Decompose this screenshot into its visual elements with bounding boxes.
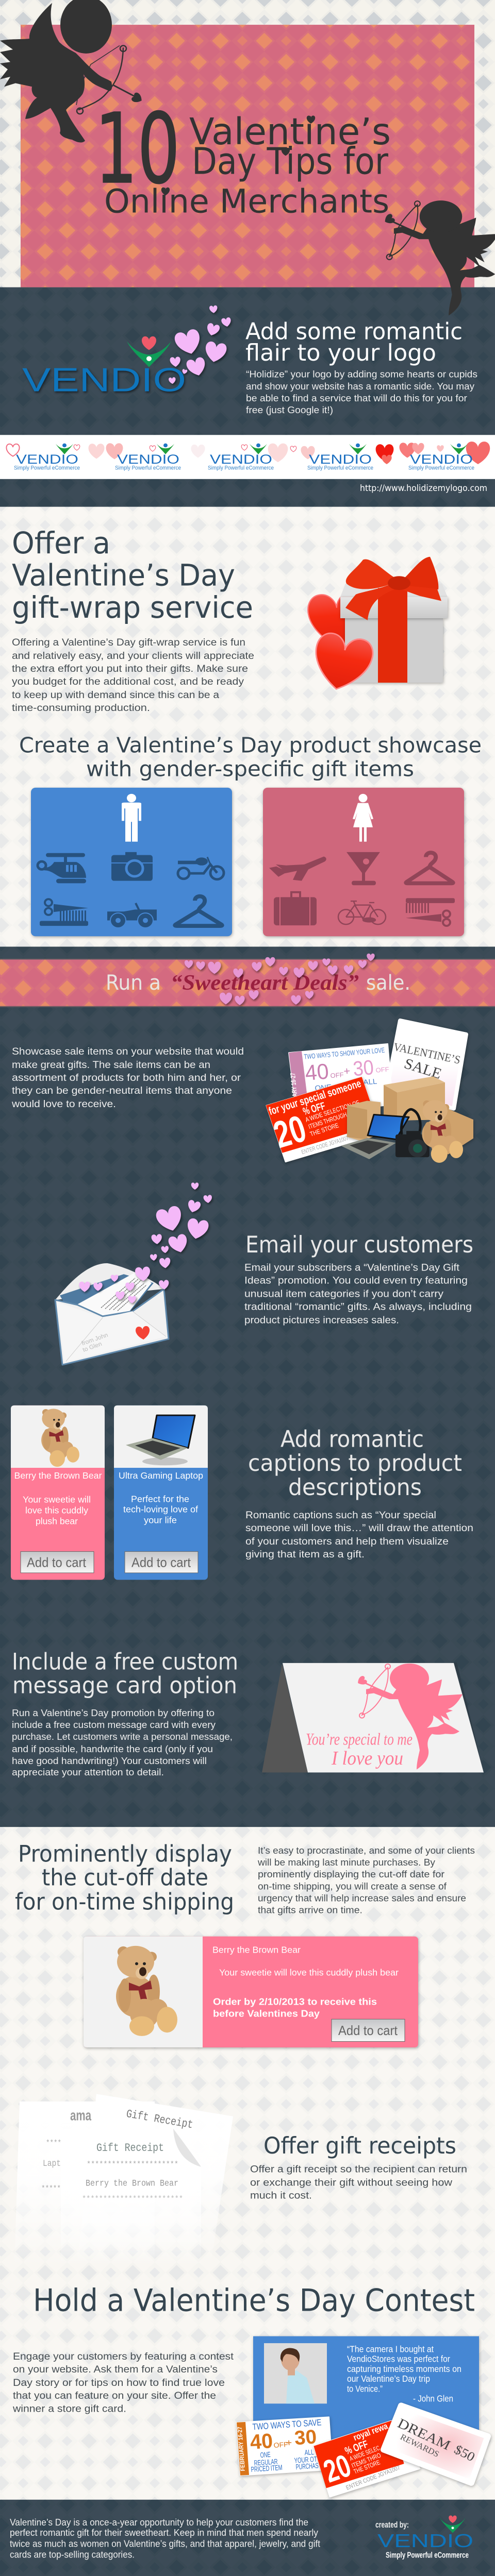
red coupon: 20 [269, 1107, 311, 1156]
icon: jeep [107, 903, 157, 928]
text block: logo tip: free (just Google it!) [246, 405, 333, 416]
banner heading: “Sweetheart Deals” [171, 971, 359, 995]
teddy bear [116, 1946, 177, 2036]
text block: message card tip: include a free custom message card with every [12, 1720, 216, 1731]
quote: VendioStores was perfect for [347, 2354, 450, 2364]
panel: dark footer background [0, 2500, 495, 2576]
text block: sale tip: they can be gender-neutral items that anyone [12, 1085, 232, 1096]
orange coupon: TWO WAYS TO SAVE [252, 2417, 322, 2432]
text block: message card tip [12, 1708, 233, 1778]
text block: message card tip: purchase. Let customers write a personal message, [12, 1732, 233, 1742]
text block: receipts tip [250, 2164, 467, 2201]
text block: captions tip: giving that item as a gift. [245, 1549, 365, 1560]
text block: cut-off tip: It’s easy to procrastinate, and some of your clients [258, 1845, 475, 1856]
card message [306, 1730, 412, 1769]
text block: gift-wrap tip [12, 637, 254, 714]
red coupon: ITEMS THROUGH [307, 1111, 348, 1130]
product text: Your sweetie will [23, 1495, 91, 1504]
icon: woman [353, 794, 373, 842]
icon: motorcycle [178, 857, 224, 879]
red coupon: % OFF [343, 2438, 370, 2457]
panel: light gift-wrap and showcase background [0, 507, 495, 947]
envelope writing: from John [81, 1332, 109, 1347]
icon: suitcase [274, 892, 317, 925]
back left receipt [14, 2102, 155, 2266]
illustration: love letter envelope with hearts: to Glen [82, 1341, 103, 1353]
text block: email tip: product pictures increases sales. [244, 1315, 399, 1326]
teddy bear [422, 1100, 463, 1163]
valentine's sale card [387, 1021, 466, 1109]
logo sample 3: VENDIO [210, 452, 272, 467]
logo sample 2: VENDIO [117, 452, 179, 467]
floating hearts [169, 305, 232, 384]
logo sample 4: VENDIO [309, 452, 372, 467]
text block: contest tip [12, 2351, 234, 2415]
text block: cut-off tip: on-time shipping, you will create a sense of [258, 1882, 447, 1892]
product text: Ultra Gaming Laptop [119, 1471, 203, 1481]
orange coupon: ALL [304, 2448, 314, 2457]
title [95, 93, 391, 221]
listing text: Berry the Brown Bear [212, 1945, 301, 1955]
illustration: sale collage [267, 1021, 473, 1163]
icon: bicycle [338, 901, 386, 924]
quote: to Venice.” [347, 2384, 383, 2394]
heading: custom message card [12, 1648, 238, 1699]
icon: hanger [175, 896, 222, 926]
red coupon: A WIDE SELECTION OF [304, 1098, 360, 1124]
quote: “The camera I bought at [347, 2344, 434, 2354]
red coupon: THE STORE [309, 1121, 340, 1138]
envelope front [55, 1289, 169, 1365]
text block: logo tip: be able to find a service that will do this for you for [246, 393, 468, 404]
orange coupon: REGULAR [254, 2458, 278, 2467]
orange coupon: 40 [249, 2429, 274, 2454]
text block: message card tip: have good handwriting!) Your customers will [12, 1756, 207, 1767]
panel: holiday logo samples strip [0, 435, 495, 479]
heading: custom message card: message card option [12, 1672, 237, 1699]
logo sample 3 [208, 444, 274, 471]
logo wordmark: VENDIO [22, 362, 186, 399]
red coupon [267, 1077, 381, 1162]
text block: conclusion: perfect romantic gift for their sweetheart. Keep in mind that men spend nearly [10, 2527, 319, 2538]
big cardboard box [384, 1076, 445, 1121]
right cardboard box [433, 1106, 473, 1154]
text block: gift-wrap tip: Offering a Valentine’s Day gift-wrap service is fun [12, 637, 245, 648]
icon: cupid bottom right [383, 200, 495, 315]
two ways coupon: 30 [352, 1056, 375, 1080]
card back [262, 1664, 308, 1772]
photo of customer [264, 2343, 327, 2403]
dream rewards gift card [384, 2405, 488, 2483]
text block: email tip: Ideas” promotion. You could even try featuring [244, 1275, 468, 1286]
text block: cut-off tip: will be making last minute purchases. By [257, 1857, 435, 1868]
quote: our Valentine’s Day trip [347, 2374, 430, 2384]
title: Day Tips for [192, 141, 388, 183]
icon: comb and scissors [406, 898, 455, 926]
text block: gift-wrap tip: to keep up with demand since this can be a [12, 689, 220, 701]
card message: I love you [331, 1748, 403, 1769]
heading: romantic captions: captions to product [248, 1450, 462, 1477]
front receipt [61, 2129, 201, 2266]
text block: receipts tip: Offer a gift receipt so the recipient can return [250, 2164, 467, 2175]
back right receipt [77, 2094, 233, 2264]
heading: romantic captions [248, 1426, 462, 1501]
front receipt: Berry the Brown Bear [86, 2179, 178, 2189]
text block: contest tip: that you can feature on your site. Offer the [13, 2390, 216, 2401]
illustration: love letter envelope with hearts [55, 1182, 212, 1365]
icon: scissors and comb [40, 899, 88, 926]
panel: hero background [0, 0, 495, 287]
orange coupon: YOUR OT [294, 2455, 317, 2465]
heading: product showcase: with gender-specific gift items [86, 757, 414, 782]
text block: captions tip [245, 1510, 473, 1560]
front receipt: ************************ [82, 2195, 183, 2204]
two ways coupon: + [343, 1064, 351, 1077]
logo person [439, 2515, 466, 2533]
heading: romantic flair [245, 318, 463, 366]
icon: man [122, 794, 141, 842]
logo sample 5 [408, 444, 474, 471]
front receipt: Gift Receipt [96, 2141, 164, 2155]
icon: hanger [406, 853, 453, 883]
panel: testimonial [253, 2336, 479, 2442]
product text: your life [144, 1515, 177, 1526]
heading: romantic captions: Add romantic [280, 1426, 424, 1452]
credit: created by Vendio [375, 2515, 473, 2560]
orange coupon: PURCHAS [295, 2462, 319, 2471]
title: Online Merchants [104, 183, 389, 221]
orange coupon [237, 2417, 333, 2476]
teddy bear [41, 1409, 79, 1467]
text block: gift-wrap tip: you budget for the additional cost, and be ready [12, 676, 244, 687]
heading: product showcase: Create a Valentine’s Day product showcase [19, 733, 482, 757]
panel: product card laptop [114, 1405, 208, 1580]
quote [347, 2344, 461, 2403]
logo sample 5: Simply Powerful eCommerce [408, 465, 474, 471]
logo sample 2: Simply Powerful eCommerce [115, 465, 181, 471]
heading: cut-off date: the cut-off date [42, 1864, 208, 1891]
text block: conclusion: cards are top-selling categories. [10, 2549, 135, 2560]
orange coupon: 30 [294, 2426, 318, 2449]
heading: gift-wrap service: gift-wrap service [12, 590, 253, 625]
icon: cupid top left [0, 0, 144, 143]
logo sample 1: Simply Powerful eCommerce [14, 465, 80, 471]
icon: martini glass [346, 852, 380, 885]
logo sample 2 [115, 444, 181, 471]
panel: sweetheart deals banner [0, 954, 495, 1007]
text block: logo tip: “Holidize” your logo by adding some hearts or cupids [246, 369, 477, 380]
two ways coupon: ONE [315, 1083, 332, 1093]
text block: receipts tip: much it cost. [250, 2190, 312, 2201]
red coupon: ENTER CODE JGYA1007 [345, 2464, 401, 2491]
two ways coupon: BRUARY 16-27 [289, 1073, 300, 1108]
listing text [212, 1945, 399, 2019]
red coupon: % OFF [302, 1100, 327, 1117]
text block: sale tip: make great gifts. The sale items can be an [12, 1059, 210, 1071]
banner hearts [185, 954, 375, 1005]
product text [119, 1471, 203, 1526]
add to cart button [125, 1552, 198, 1573]
two ways coupon: OFF [330, 1071, 344, 1079]
add to cart button: Add to cart [338, 2023, 398, 2038]
red coupon: for your special someone [267, 1077, 362, 1117]
back left receipt: **** [46, 2140, 61, 2147]
back left receipt: Lapt [43, 2159, 61, 2169]
add to cart button [332, 2019, 405, 2041]
heading: romantic flair: Add some romantic [245, 318, 463, 345]
dream rewards gift card: $50 [452, 2442, 477, 2464]
letter [77, 1272, 152, 1316]
heading: gift-wrap service [12, 526, 253, 625]
red coupon: THE STORE [352, 2459, 381, 2476]
panel: dark logo section background [0, 287, 495, 507]
banner heading [106, 971, 410, 995]
valentine's sale card: SALE [402, 1056, 443, 1082]
back left receipt: ama [70, 2107, 91, 2124]
product text: love this cuddly [25, 1505, 88, 1515]
product text: plush bear [36, 1516, 78, 1527]
product text [14, 1471, 102, 1527]
panel: product card bear [11, 1405, 105, 1580]
text block: conclusion [10, 2517, 321, 2560]
envelope interior [60, 1274, 154, 1313]
text block: email tip [244, 1262, 472, 1326]
heading: gift receipts: Offer gift receipts [263, 2132, 456, 2159]
heading: gift-wrap service: Valentine’s Day [12, 558, 235, 592]
logo sample 3: Simply Powerful eCommerce [208, 465, 274, 471]
product text: Perfect for the [131, 1494, 189, 1504]
banner heading: sale. [366, 971, 410, 995]
panel: gifts for her [263, 788, 464, 936]
heading: cut-off date [15, 1840, 234, 1916]
panel: product listing with order-by date [84, 1937, 418, 2047]
listing text: Order by 2/10/2013 to receive this [213, 1996, 377, 2007]
product text: tech-loving love of [123, 1504, 198, 1514]
quote: - John Glen [413, 2394, 453, 2403]
add to cart button: Add to cart [27, 1555, 87, 1570]
text block: logo tip: and show your website has a romantic side. You may [246, 381, 474, 392]
text block: cut-off tip: that gifts arrive on time. [258, 1905, 362, 1916]
title: 10 [95, 93, 180, 206]
title: Valentine’s [189, 111, 391, 153]
back flap [55, 1263, 164, 1300]
panel: gifts for him [31, 788, 232, 936]
red coupon: ENTER CODE JGYA1007 [301, 1135, 349, 1156]
banner heading: Run a [106, 971, 161, 995]
rising hearts [79, 1182, 212, 1303]
icon: airplane [269, 856, 326, 881]
two ways coupon: TWO WAYS TO SHOW YOUR LOVE [304, 1046, 385, 1061]
red coupon: 20 [319, 2448, 356, 2489]
add to cart button: Add to cart [131, 1555, 191, 1570]
text block: gift-wrap tip: time-consuming production. [12, 702, 150, 714]
text block: gift-wrap tip: and relatively easy, and your clients will appreciate [12, 650, 254, 662]
decorative hearts on logos [6, 442, 490, 464]
quote: capturing timeless moments on [347, 2364, 461, 2374]
wax heart [135, 1326, 151, 1340]
orange coupon: ONE [260, 2451, 271, 2460]
text block: conclusion: twice as much as women on Valentine’s gifts, and that apparel, jewelry, and gift [10, 2538, 321, 2549]
heading: cut-off date: for on-time shipping [15, 1889, 234, 1916]
text block: logo tip [246, 369, 477, 416]
logo sample 1 [14, 444, 80, 471]
text block: captions tip: Romantic captions such as “Your special [245, 1510, 436, 1521]
two ways coupon: OFF [375, 1065, 389, 1074]
icon: helicopter [38, 853, 86, 883]
text block: message card tip: and if possible, handwrite the card (only if you [12, 1744, 213, 1755]
icon: Vendio logo with floating hearts [22, 305, 232, 399]
card front [283, 1663, 484, 1772]
text block: message card tip: appreciate your attention to detail. [12, 1767, 164, 1778]
small cardboard box [347, 1101, 381, 1141]
heading: cut-off date: Prominently display [18, 1840, 232, 1867]
heading: product showcase [19, 733, 482, 782]
orange coupon: PRICED ITEM [251, 2464, 283, 2474]
text block: captions tip: of your customers and help them visualize [245, 1536, 449, 1547]
add to cart button [21, 1552, 94, 1573]
text block: cut-off tip: prominently displaying the cut-off date for [258, 1870, 445, 1880]
text block: cut-off tip: urgency that will help increase sales and ensure [258, 1893, 466, 1904]
listing text: before Valentines Day [213, 2008, 320, 2019]
heading: gift-wrap service: Offer a [12, 526, 110, 561]
text block: email tip: Email your subscribers a “Valentine’s Day Gift [244, 1262, 459, 1273]
valentine's sale card: VALENTINE’S [392, 1040, 461, 1066]
heading: custom message card: Include a free custom [12, 1648, 238, 1675]
logo sample 1: VENDIO [16, 452, 78, 467]
logo sample 4 [307, 444, 373, 471]
orange coupon: FEBRUARY 16-27 [237, 2426, 246, 2471]
text block: contest tip: on your website. Ask them for a Valentine’s [13, 2364, 218, 2375]
heading: romantic captions: descriptions [288, 1474, 422, 1501]
panel: light cut-off, receipts and contest background [0, 1827, 495, 2500]
laptop [341, 1114, 409, 1159]
two ways coupon [289, 1044, 393, 1114]
back right receipt: Gift Receipt [125, 2107, 194, 2131]
text block: contest tip: Day story or for tips on how to find true love [13, 2377, 225, 2388]
text block: receipts tip: or exchange their gift without seeing how [250, 2177, 453, 2188]
text block: captions tip: someone will love this…” will draw the attention [245, 1522, 473, 1534]
text block: sale tip: assortment of products for both him and her, or [12, 1072, 241, 1083]
red coupon: royal rewa [352, 2421, 389, 2443]
illustration: contest coupons [237, 2405, 488, 2497]
text block: conclusion: Valentine’s Day is a once-a-year opportunity to help your customers find the [10, 2517, 308, 2528]
panel: dark sale, email, captions and card background [0, 947, 495, 1827]
laptop [126, 1415, 195, 1465]
illustration: message card [262, 1663, 484, 1772]
front receipt: ********************** [87, 2161, 178, 2169]
illustration: gift receipts [14, 2094, 233, 2266]
text block: email tip: unusual item categories if you don’t carry [244, 1289, 443, 1299]
pink cupid [356, 1664, 463, 1770]
icon: camera [111, 852, 153, 881]
red coupon [314, 2421, 420, 2497]
red coupon: ITEMS THRO [350, 2451, 382, 2469]
text block: contest tip: Engage your customers by featuring a contest [13, 2351, 234, 2362]
heading: romantic flair: flair to your logo [245, 340, 436, 366]
two ways coupon: 40 [304, 1059, 330, 1086]
text block: email tip: traditional “romantic” gifts. As always, including [244, 1301, 472, 1312]
logo person [127, 341, 171, 367]
icon: gift box with hearts [307, 557, 448, 694]
text block: contest tip: winner a store gift card. [12, 2403, 126, 2415]
card message: You’re special to me [306, 1730, 412, 1749]
dream rewards gift card: DREAM [395, 2415, 453, 2453]
text block: gift-wrap tip: the extra effort you put into their gifts. Make sure [12, 663, 248, 674]
dream rewards gift card: REWARDS [399, 2432, 441, 2459]
logo sample 5: VENDIO [410, 452, 473, 467]
text block: sale tip: would love to receive. [11, 1098, 116, 1110]
red coupon: A WIDE SELEC [348, 2444, 381, 2463]
camera and headphones [395, 1109, 430, 1157]
text block: sale tip [11, 1046, 244, 1110]
wordmark: VENDIO [377, 2530, 473, 2551]
text block: cut-off tip [257, 1845, 475, 1916]
two ways coupon: ALL [363, 1078, 377, 1087]
back left receipt: ***** [41, 2185, 61, 2193]
text block: sale tip: Showcase sale items on your website that would [12, 1046, 244, 1057]
text block: message card tip: Run a Valentine’s Day promotion by offering to [12, 1708, 214, 1719]
product text: Berry the Brown Bear [14, 1471, 102, 1481]
credit: created by Vendio: created by: [375, 2520, 409, 2530]
logo sample 4: Simply Powerful eCommerce [307, 465, 373, 471]
orange coupon: OFF [273, 2441, 288, 2449]
listing text: Your sweetie will love this cuddly plush bear [219, 1968, 399, 1978]
orange coupon: + [286, 2437, 292, 2449]
